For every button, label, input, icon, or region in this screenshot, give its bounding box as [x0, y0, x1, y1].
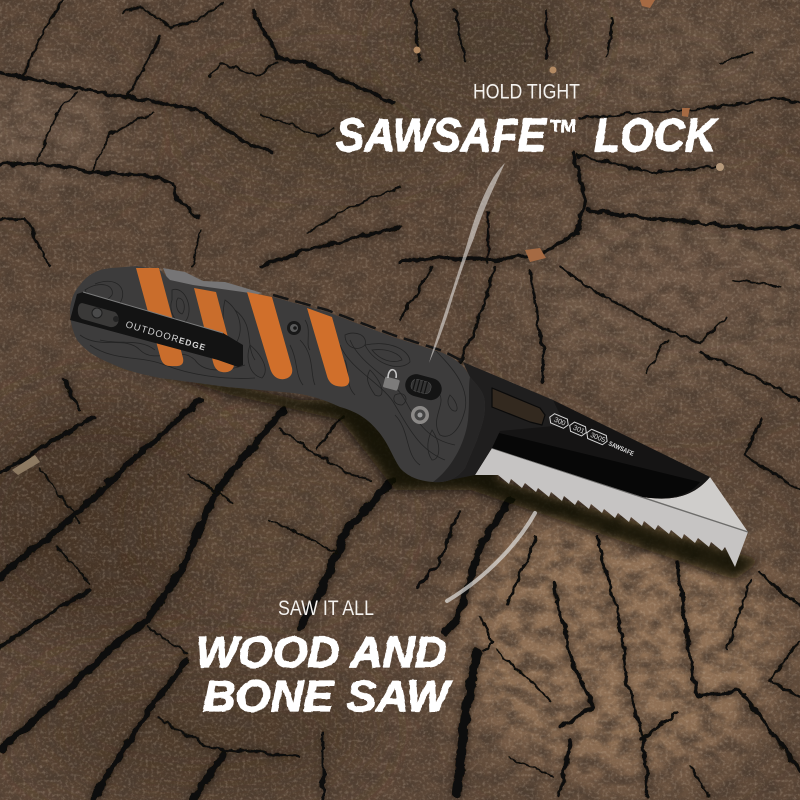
saw blade steel [475, 448, 748, 567]
orange grip stripe 4 [307, 308, 349, 387]
heading: wood and bone saw: WOOD AND [196, 628, 447, 677]
pocket clip [70, 292, 243, 367]
blade model numbers [553, 417, 606, 444]
heading: SawSafe lock: SAWSAFE [336, 109, 547, 161]
lock slider [403, 372, 444, 403]
blade dark hollow [492, 432, 700, 498]
blade edge line [492, 448, 748, 532]
knife [70, 266, 748, 567]
blade model numbers: 301 [572, 425, 585, 436]
blade brand text: SAWSAFE [607, 440, 635, 458]
heading: SawSafe lock: LOCK [594, 109, 719, 161]
handle dark rim [433, 377, 485, 482]
heading: SawSafe lock: ™ [548, 113, 578, 155]
orange grip stripe 2 [194, 288, 234, 372]
handle body [70, 266, 485, 482]
clip brand text: OUTDOOREDGE [124, 319, 207, 354]
blade hex badges [548, 412, 609, 446]
label: saw it all: SAW IT ALL [278, 596, 374, 620]
wood chips [12, 0, 724, 475]
label: hold tight: HOLD TIGHT [473, 80, 580, 104]
heading: wood and bone saw: BONE SAW [203, 672, 453, 721]
lock icon [383, 370, 400, 391]
callout line: lock [429, 163, 505, 363]
clip hole [78, 303, 119, 327]
blade model numbers: 3005 [589, 432, 606, 444]
orange grip stripe 1 [136, 268, 183, 366]
bolster slot [492, 388, 545, 425]
blade tip bevel [643, 477, 748, 532]
knife shadow [80, 350, 762, 580]
lower pivot screw [411, 406, 429, 424]
orange grip stripe 3 [247, 292, 292, 379]
handle liner notch [163, 268, 262, 300]
handle screw [287, 321, 301, 335]
heading: SawSafe lock [336, 109, 719, 161]
topographic contour lines [80, 281, 466, 465]
black blade spine [492, 400, 710, 499]
callout line: saw [447, 513, 535, 601]
blade model numbers: 300 [553, 417, 566, 428]
heading: wood and bone saw [196, 628, 453, 721]
handle top edge liner [273, 295, 468, 364]
black bolster frame [450, 362, 565, 480]
